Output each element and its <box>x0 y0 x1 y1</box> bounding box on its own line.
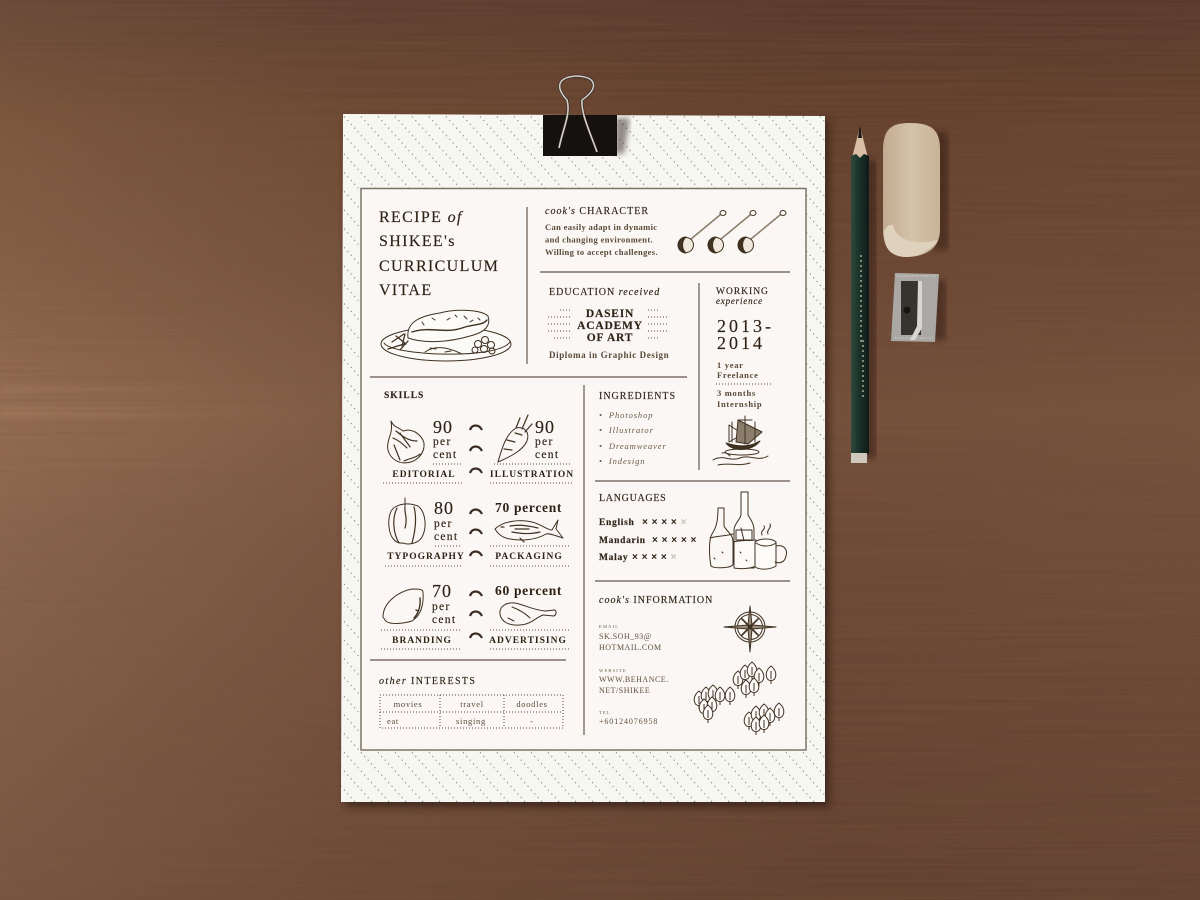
title <box>379 209 499 299</box>
skill: advertising 60 percent: 60 percent <box>495 583 562 598</box>
title: RECIPE of <box>379 209 464 226</box>
working experience: 3 months <box>717 388 756 398</box>
cook's character <box>545 206 658 257</box>
cook's information: WWW.BEHANCE. <box>599 675 669 684</box>
icon: three spoons <box>678 210 786 253</box>
cook's information: WEBSITE <box>599 668 627 673</box>
other interests: doodles <box>516 699 548 709</box>
working experience: 2014 <box>717 333 765 353</box>
sheet with diagonal dotted pattern <box>341 114 825 802</box>
skill: packaging 70 percent <box>490 500 569 566</box>
ingredients: • Illustrator <box>599 425 654 435</box>
cook's information: NET/SHIKEE <box>599 686 650 695</box>
ingredients <box>599 391 676 466</box>
resume sheet <box>341 114 825 802</box>
skill: branding 70 percent: BRANDING <box>392 636 452 646</box>
ingredients: • Dreamweaver <box>599 441 667 451</box>
languages: English <box>599 518 635 528</box>
skill: branding 70 percent: cent <box>432 614 456 626</box>
languages <box>599 493 700 563</box>
other interests <box>379 676 563 728</box>
working experience: 2013- <box>717 316 774 336</box>
skill: branding 70 percent <box>381 581 462 649</box>
cook's information: HOTMAIL.COM <box>599 643 662 652</box>
skill: editorial 90 percent <box>383 417 462 483</box>
languages: ××××× <box>642 517 690 528</box>
section dividers <box>370 207 790 735</box>
eraser <box>883 123 948 257</box>
title: CURRICULUM <box>379 258 499 275</box>
skill: illustration 90 percent: per <box>535 436 554 448</box>
cook's information: EMAIL <box>599 624 619 629</box>
icon: plated dish <box>381 310 511 361</box>
skill: typography 80 percent: 80 <box>434 498 454 518</box>
cook's information: SK.SOH_93@ <box>599 632 652 641</box>
skill: illustration 90 percent: ILLUSTRATION <box>490 470 574 480</box>
arc dividers between skills <box>470 426 482 638</box>
other interests: - <box>530 716 534 726</box>
languages: LANGUAGES <box>599 493 666 504</box>
paper shadow <box>345 120 829 807</box>
skill: typography 80 percent: TYPOGRAPHY <box>387 552 465 562</box>
education: Diploma in Graphic Design <box>549 350 669 360</box>
other interests: movies <box>394 699 422 709</box>
icon: compass <box>724 606 776 652</box>
education: DASEIN <box>586 308 634 320</box>
cook's character: Willing to accept challenges. <box>545 247 658 257</box>
other interests: travel <box>460 699 484 709</box>
languages: ××××× <box>632 552 680 563</box>
skill: editorial 90 percent: per <box>433 436 452 448</box>
working experience: 1 year <box>717 360 744 370</box>
binder clip <box>543 76 630 156</box>
pencil lettering marks <box>861 255 863 400</box>
icon: lemon <box>383 589 423 624</box>
other interests: eat <box>387 716 399 726</box>
languages: Malay <box>599 553 628 563</box>
icon: fish <box>495 520 563 542</box>
icon: onion <box>388 421 424 463</box>
inner frame panel <box>361 188 806 750</box>
skill: editorial 90 percent: 90 <box>433 417 453 437</box>
icon: forest of trees <box>694 662 784 735</box>
other interests: singing <box>456 716 486 726</box>
skill: branding 70 percent: 70 <box>432 581 452 601</box>
skill: illustration 90 percent <box>490 415 574 483</box>
cook's information: +60124076958 <box>599 717 658 726</box>
skill: advertising 60 percent <box>489 583 569 649</box>
dotted ornaments <box>548 310 668 338</box>
title: SHIKEE's <box>379 233 456 250</box>
skill: packaging 70 percent: PACKAGING <box>495 552 563 562</box>
languages: ××××× <box>652 535 700 546</box>
other interests: other INTERESTS <box>379 676 476 687</box>
skill: typography 80 percent <box>385 498 465 566</box>
education: ACADEMY <box>577 320 643 332</box>
skill: editorial 90 percent: cent <box>433 449 457 461</box>
icon: bell pepper <box>389 498 425 544</box>
cook's information: TEL <box>599 710 611 715</box>
education <box>548 287 669 360</box>
cook's information: cook's INFORMATION <box>599 595 713 606</box>
education: OF ART <box>587 332 633 344</box>
icon: sailing ship <box>713 416 768 465</box>
pencil <box>851 126 876 463</box>
languages: Mandarin <box>599 536 646 546</box>
cook's information <box>599 595 713 726</box>
icon: chicken drumstick <box>500 603 556 625</box>
skill: packaging 70 percent: 70 percent <box>495 500 562 515</box>
cook's character: Can easily adapt in dynamic <box>545 222 657 232</box>
cook's character: and changing environment. <box>545 234 653 244</box>
interests dotted table <box>380 695 563 728</box>
working experience: WORKING <box>716 287 769 297</box>
skill: advertising 60 percent: ADVERTISING <box>489 636 567 646</box>
working experience <box>716 287 774 409</box>
clip handle wire <box>559 76 597 152</box>
ingredients: INGREDIENTS <box>599 391 676 402</box>
icon: beetroot carrot <box>498 415 532 462</box>
working experience: experience <box>716 296 763 306</box>
sharpener <box>891 273 946 342</box>
ingredients: • Photoshop <box>599 410 653 420</box>
skills heading: SKILLS <box>384 391 424 401</box>
skill: editorial 90 percent: EDITORIAL <box>392 470 456 480</box>
education: EDUCATION received <box>549 287 660 298</box>
skill: illustration 90 percent: cent <box>535 449 559 461</box>
title: VITAE <box>379 282 432 299</box>
icon: bottles and mug <box>710 492 787 569</box>
cook's character: cook's CHARACTER <box>545 206 649 217</box>
ingredients: • Indesign <box>599 456 645 466</box>
skill: branding 70 percent: per <box>432 601 451 613</box>
skill: typography 80 percent: per <box>434 518 453 530</box>
skill: typography 80 percent: cent <box>434 531 458 543</box>
skill: illustration 90 percent: 90 <box>535 417 555 437</box>
working experience: Internship <box>717 399 762 409</box>
working experience: Freelance <box>717 370 759 380</box>
